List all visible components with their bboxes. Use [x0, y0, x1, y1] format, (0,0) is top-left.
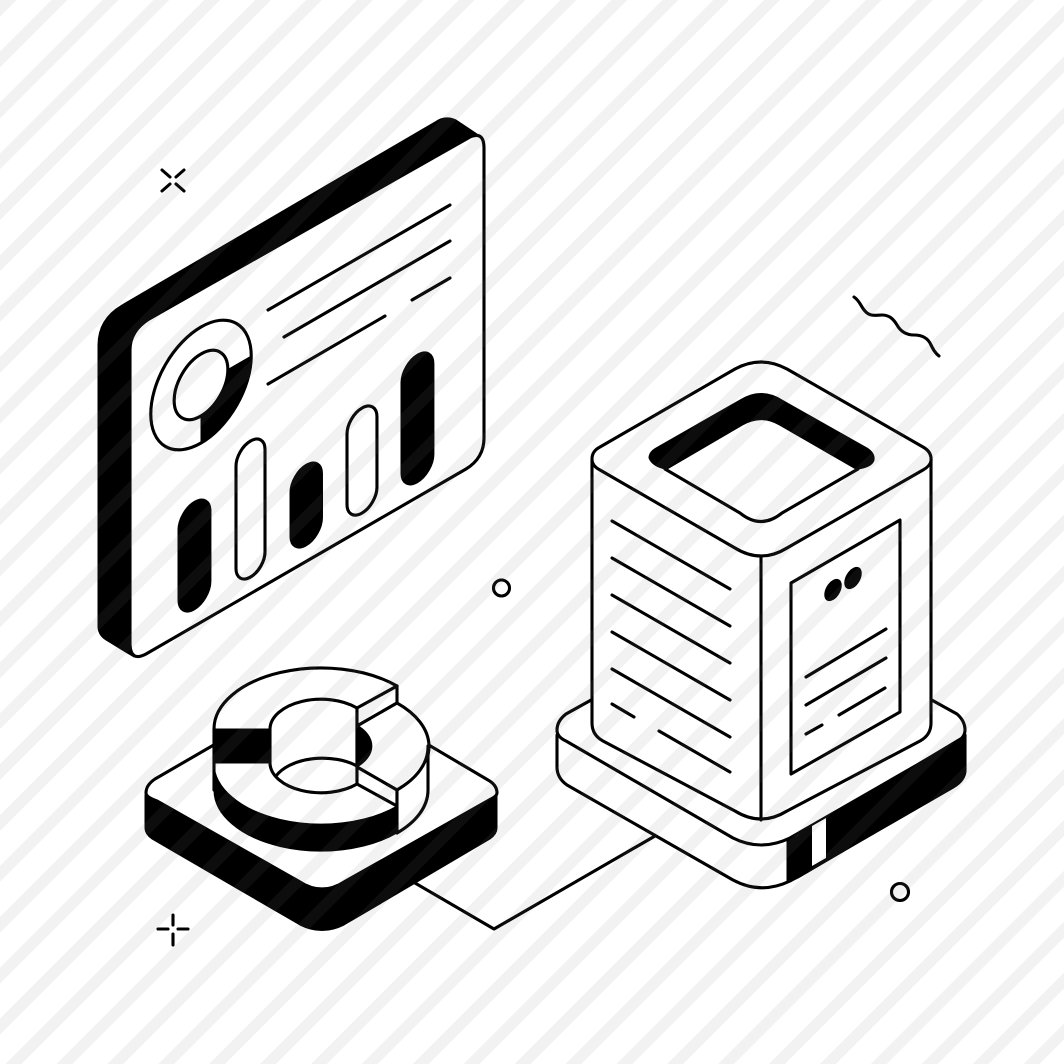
upper ring outer arc: [214, 668, 397, 729]
label text lines: [806, 629, 886, 734]
tower top face: [592, 362, 931, 556]
tower top black rim: [649, 394, 874, 469]
left face text lines: [612, 521, 730, 772]
right slice lower cut face: [357, 767, 397, 806]
right slice faces: [357, 686, 397, 726]
plate black side: [145, 795, 497, 930]
panel: dashboard screen: [98, 118, 484, 657]
base top surface: [557, 620, 965, 845]
tower top opening: [665, 418, 858, 522]
text lines on screen: [268, 205, 450, 384]
panel: exploded 3D donut chart: [214, 668, 429, 851]
base black side section: [787, 735, 965, 882]
right face label panel: [791, 520, 900, 774]
icon: x sparkle: [162, 170, 184, 191]
lower ring black side wall: [214, 763, 397, 851]
right slice outer side wall: [397, 746, 428, 833]
left slice black cut face: [214, 729, 270, 763]
ring chart on screen: [151, 298, 251, 472]
plate top surface: [146, 690, 497, 889]
tower front corner edge: [759, 558, 763, 820]
hole: [270, 699, 357, 793]
tower body: [592, 460, 931, 819]
panel: server tower: [592, 362, 931, 820]
label dots: [825, 564, 861, 604]
panel: donut plate: [145, 690, 497, 930]
base white notch: [812, 818, 826, 866]
hole floor arc: [276, 758, 357, 776]
right slice inner black wall: [357, 725, 372, 767]
icon: small circle centre: [494, 580, 510, 596]
icon: plus sparkle: [158, 915, 188, 945]
screen black side edge: [98, 118, 484, 657]
panel: server tower base: [557, 620, 965, 888]
bar chart on screen: [178, 345, 434, 619]
icon: squiggle: [854, 297, 939, 356]
donut silhouette: [214, 668, 428, 851]
icon: small circle lower right: [892, 884, 908, 900]
base side wall: [557, 735, 965, 888]
connector line between plate and tower base: [415, 836, 655, 929]
donut left edge: [212, 729, 216, 790]
screen front face: [130, 135, 484, 657]
